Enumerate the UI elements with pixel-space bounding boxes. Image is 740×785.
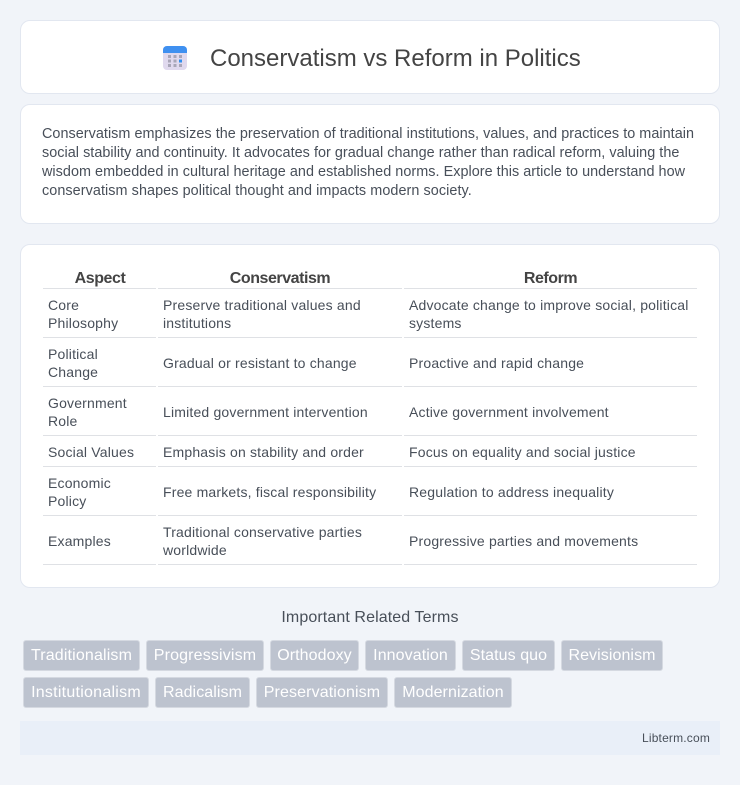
text: Change [48,364,98,380]
text: Social Values [48,444,134,460]
text: Regulation to address inequality [409,484,614,500]
text: Conservatism emphasizes the preservation of traditional institutions, values, and practices to maintain [42,126,694,142]
text: Proactive and rapid change [409,355,584,371]
footer bar [20,721,720,755]
text: wisdom embedded in cultural heritage and established norms. Explore this article to understand how [42,164,685,180]
text: Preserve traditional values and [163,297,361,313]
header panel [20,20,720,94]
text: Modernization [402,684,504,701]
text: institutions [163,315,231,331]
text: Conservatism [230,270,330,287]
text: Government [48,395,127,411]
text: Limited government intervention [163,404,368,420]
text: Emphasis on stability and order [163,444,364,460]
text: Core [48,297,79,313]
text: Advocate change to improve social, political [409,297,689,313]
text: Revisionism [568,647,656,664]
text: Reform [524,270,577,287]
table panel [20,244,720,588]
text: Traditionalism [31,647,132,664]
related terms heading: Important Related Terms [281,609,459,626]
title: Conservatism vs Reform in Politics [210,45,581,72]
footer credit: Libterm.com [642,731,710,745]
text: worldwide [163,542,227,558]
text: conservatism shapes political thought and impacts modern society. [42,183,472,199]
text: Policy [48,493,86,509]
text: Examples [48,533,111,549]
text: Philosophy [48,315,118,331]
text: Orthodoxy [277,647,352,664]
text: Political [48,346,98,362]
text: Focus on equality and social justice [409,444,636,460]
comparison table [43,270,697,565]
related terms tags [23,640,663,708]
text: Status quo [470,647,547,664]
text: Progressive parties and movements [409,533,638,549]
text: Free markets, fiscal responsibility [163,484,376,500]
text: Innovation [373,647,448,664]
text: Radicalism [163,684,242,701]
text: social stability and continuity. It advocates for gradual change rather than radical reform, valuing the [42,145,679,161]
text: Aspect [75,270,125,287]
text: Gradual or resistant to change [163,355,357,371]
text: Preservationism [264,684,380,701]
text: Progressivism [154,647,256,664]
text: Traditional conservative parties [163,524,362,540]
intro panel [20,104,720,224]
text: Active government involvement [409,404,609,420]
text: Role [48,413,78,429]
text: Economic [48,475,111,491]
text: systems [409,315,462,331]
intro text [42,126,694,199]
icon: calendar [163,46,187,70]
text: Institutionalism [31,684,141,701]
